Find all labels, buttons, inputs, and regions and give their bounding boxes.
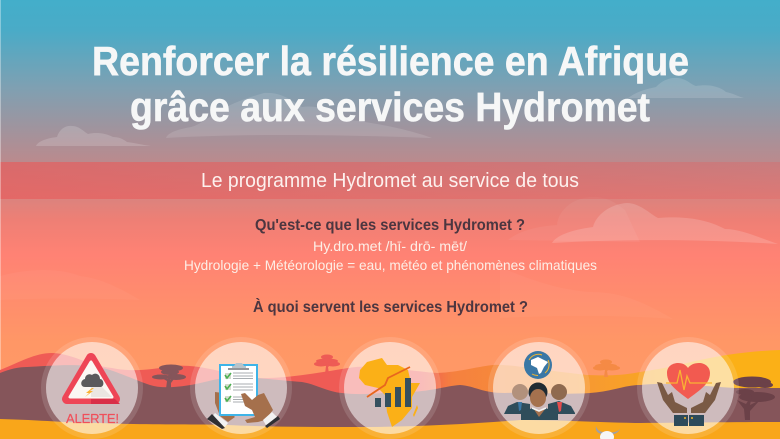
- subtitle band: [0, 162, 780, 199]
- icon circle halos: [41, 337, 739, 439]
- cow skull: [596, 426, 620, 439]
- icon: heart and caring hands: [657, 363, 721, 426]
- icon: checklist and hands: [207, 363, 280, 429]
- tree: dark acacia left: [152, 364, 186, 389]
- definition text: [184, 238, 597, 273]
- back ridge: [0, 350, 780, 439]
- left edge strip: [0, 0, 1, 439]
- title: [92, 38, 689, 130]
- clouds: [0, 78, 778, 319]
- tree: orange acacia: [593, 360, 620, 377]
- question: what are Hydromet services: Qu'est-ce que les services Hydromet ?: [255, 217, 525, 234]
- alert label: ALERTE!: [66, 411, 119, 426]
- question: what are they for: À quoi servent les services Hydromet ?: [253, 297, 528, 316]
- title: grâce aux services Hydromet: [130, 84, 650, 130]
- tree: red acacia: [314, 354, 340, 374]
- definition text: Hy.dro.met /hī- drō- mēt/: [313, 238, 467, 254]
- maroon mountains: [0, 365, 780, 439]
- definition text: Hydrologie + Météorologie = eau, météo et phénomènes climatiques: [184, 257, 597, 273]
- title: Renforcer la résilience en Afrique: [92, 38, 689, 84]
- tree: large acacia right: [733, 376, 775, 420]
- icon: Africa growth chart: [359, 358, 420, 427]
- landscape: [0, 350, 780, 439]
- icon: weather alert: [66, 358, 120, 426]
- orange ground: [0, 419, 780, 439]
- subtitle: Le programme Hydromet au service de tous: [201, 170, 579, 192]
- icon: people with Africa emblem: [504, 351, 575, 420]
